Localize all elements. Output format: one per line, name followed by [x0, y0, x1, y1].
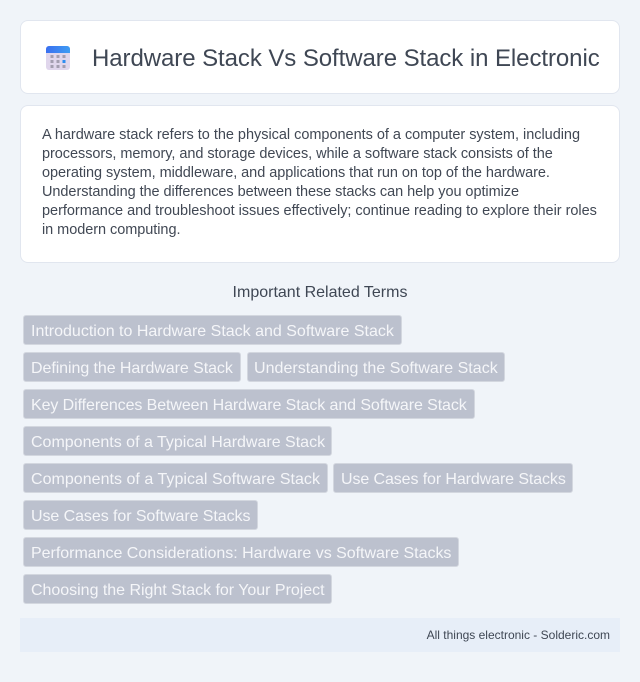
tag	[23, 315, 402, 345]
title: Hardware Stack Vs Software Stack in Electronic	[92, 45, 600, 72]
tag	[23, 426, 332, 456]
footer	[20, 618, 620, 652]
intro text panel	[20, 105, 620, 263]
tag: Defining the Hardware Stack	[31, 360, 233, 377]
tag	[23, 463, 328, 493]
tag: Components of a Typical Software Stack	[31, 471, 320, 488]
related terms heading: Important Related Terms	[233, 284, 407, 301]
tag	[23, 537, 459, 567]
tag: Key Differences Between Hardware Stack and Software Stack	[31, 397, 467, 414]
tag	[23, 574, 332, 604]
tag	[23, 500, 258, 530]
tag list	[23, 315, 573, 604]
footer: All things electronic - Solderic.com	[427, 628, 610, 642]
tag	[333, 463, 573, 493]
tag: Understanding the Software Stack	[254, 360, 498, 377]
intro text panel: processors, memory, and storage devices, while a software stack consists of the	[42, 146, 553, 162]
tag	[247, 352, 505, 382]
tag: Use Cases for Software Stacks	[31, 508, 250, 525]
tag	[23, 389, 475, 419]
tag: Introduction to Hardware Stack and Software Stack	[31, 323, 394, 340]
tag: Choosing the Right Stack for Your Project	[31, 582, 325, 599]
intro text panel: A hardware stack refers to the physical components of a computer system, including	[42, 127, 580, 143]
icon: grid calendar	[46, 46, 70, 70]
header card	[20, 20, 620, 94]
tag	[23, 352, 241, 382]
intro text panel: in modern computing.	[42, 222, 180, 238]
intro text panel: operating system, middleware, and applications that run on top of the hardware.	[42, 165, 550, 181]
tag: Performance Considerations: Hardware vs Software Stacks	[31, 545, 451, 562]
tag: Components of a Typical Hardware Stack	[31, 434, 325, 451]
intro text panel: Understanding the differences between these stacks can help you optimize	[42, 184, 519, 200]
intro text panel: performance and troubleshoot issues effectively; continue reading to explore their roles	[42, 203, 597, 219]
tag: Use Cases for Hardware Stacks	[341, 471, 566, 488]
